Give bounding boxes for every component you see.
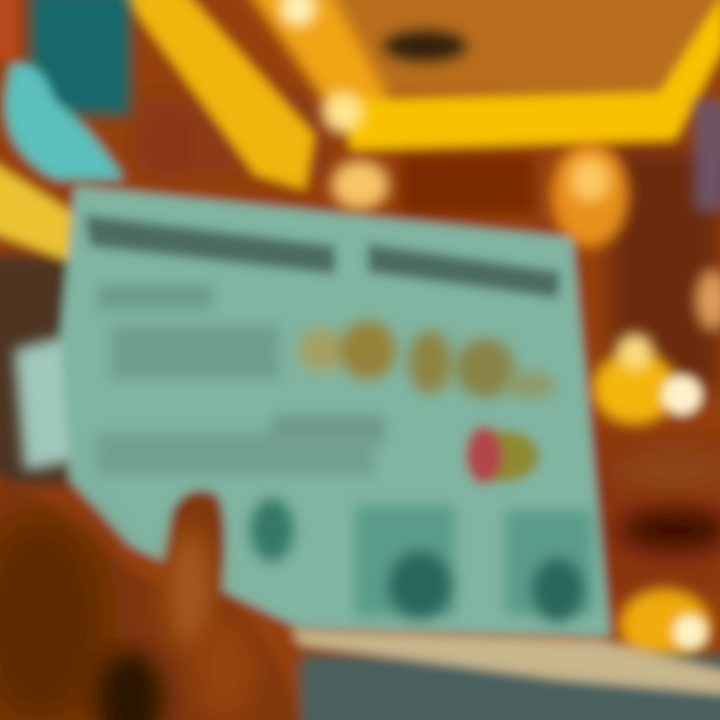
right warm lights <box>593 334 720 661</box>
title bar right <box>368 244 560 298</box>
yellow ceiling trim <box>112 0 720 190</box>
table edge and lower surface <box>290 630 720 720</box>
body text left <box>98 285 280 380</box>
ceiling lights <box>280 0 720 330</box>
card left ghost edge <box>15 335 78 470</box>
infographic card <box>60 186 610 636</box>
pie chart <box>466 426 539 484</box>
gold figures <box>298 320 556 399</box>
bar chart tiles <box>250 498 593 622</box>
body text middle <box>95 416 384 476</box>
ceiling panel <box>320 0 720 215</box>
yellow band at left <box>0 160 72 262</box>
title bar left <box>85 215 335 274</box>
teal figure at upper left <box>0 0 194 180</box>
hand holding card <box>0 465 305 720</box>
